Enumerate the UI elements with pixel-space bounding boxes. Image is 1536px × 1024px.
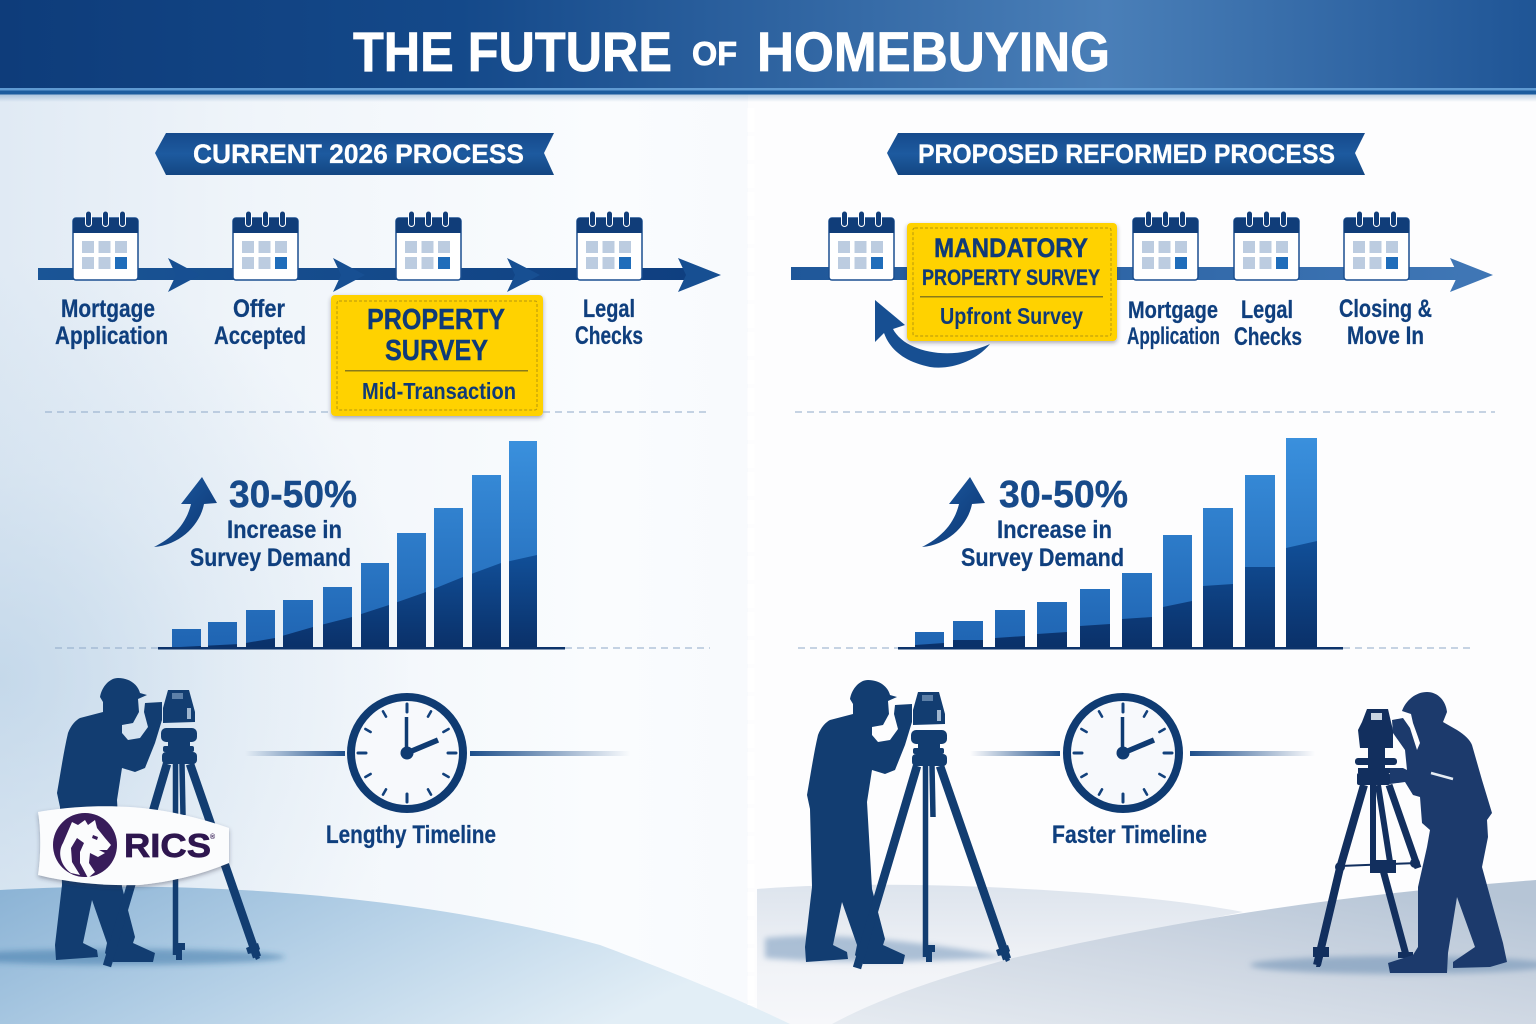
background: left panel [0, 0, 748, 1024]
RICS logo: RICS [124, 827, 211, 864]
callout: property survey mid-transaction: Mid-Transaction [362, 378, 516, 404]
calendar icon: offer accepted [233, 211, 298, 280]
title: HOMEBUYING [757, 20, 1110, 83]
title: THE FUTURE [353, 20, 672, 83]
banner: proposed reformed process: PROPOSED REFORMED PROCESS [918, 139, 1335, 169]
timeline arrow: current [38, 258, 721, 292]
title: OF [692, 35, 737, 72]
step label: offer accepted [214, 295, 306, 350]
clock: lengthy timeline [245, 694, 630, 812]
stat: 30-50% increase in survey demand: Increase in [227, 516, 342, 544]
surveyor silhouette [55, 678, 260, 966]
background: right panel [748, 0, 1536, 1024]
step label: mortgage application [1127, 297, 1220, 350]
step label: offer accepted: Accepted [214, 322, 306, 350]
step label: mortgage application [55, 295, 168, 350]
step label: mortgage application: Mortgage [61, 295, 155, 323]
callout: mandatory property survey: Upfront Survey [940, 303, 1083, 329]
step label: mortgage application: Application [55, 322, 168, 350]
step label: legal checks: Checks [575, 322, 643, 350]
stat: 30-50% increase in survey demand: Survey Demand [190, 544, 351, 572]
banner: current 2026 process: CURRENT 2026 PROCESS [193, 139, 524, 169]
centre divider [748, 108, 754, 1005]
callout: mandatory property survey: PROPERTY SURVEY [922, 265, 1100, 290]
banner: current 2026 process [155, 133, 554, 175]
step label: legal checks: Checks [1234, 323, 1302, 351]
RICS logo [38, 806, 229, 885]
calendar icon: survey start [829, 211, 894, 280]
clock: faster timeline [970, 694, 1315, 812]
calendar icon: mortgage application [73, 211, 138, 280]
callout: mandatory property survey: MANDATORY [934, 233, 1088, 263]
label: faster timeline: Faster Timeline [1052, 821, 1207, 849]
timeline arrow: reformed [791, 258, 1493, 292]
step label: offer accepted: Offer [233, 295, 285, 323]
stat: 30-50% increase in survey demand: Increase in [997, 516, 1112, 544]
right front hill [832, 880, 1536, 1024]
step label: closing and move in: Move In [1347, 322, 1424, 350]
step label: mortgage application: Mortgage [1128, 297, 1218, 324]
callout: property survey mid-transaction: SURVEY [385, 335, 488, 367]
step label: legal checks [1234, 296, 1302, 351]
step label: legal checks [575, 295, 643, 350]
section divider [45, 412, 710, 648]
callout: property survey mid-transaction [331, 295, 543, 416]
curved arrow back to start [875, 300, 990, 368]
calendar icon: closing and move in [1344, 211, 1409, 280]
stat: 30-50% increase in survey demand: 30-50% [229, 474, 357, 516]
step label: legal checks: Legal [1241, 296, 1293, 324]
header band [0, 0, 1536, 102]
title [353, 20, 1110, 83]
right back hill [757, 885, 1243, 1024]
calendar icon: legal checks [1234, 211, 1299, 280]
callout: mandatory property survey [907, 223, 1117, 341]
section divider [795, 412, 1495, 648]
surveyor silhouette: right [1313, 692, 1507, 973]
icon: growth arrow [154, 477, 217, 547]
step label: legal checks: Legal [583, 295, 635, 323]
step label: closing and move in [1339, 295, 1432, 350]
stat: 30-50% increase in survey demand [961, 474, 1128, 572]
stat: 30-50% increase in survey demand [190, 474, 357, 572]
banner: proposed reformed process [887, 133, 1365, 175]
step label: mortgage application: Application [1127, 323, 1220, 350]
callout: property survey mid-transaction: PROPERTY [367, 304, 505, 336]
bar chart: survey demand [898, 438, 1343, 650]
left ground hill [0, 887, 790, 1024]
ground shadows [0, 936, 1536, 974]
icon: growth arrow [922, 477, 985, 547]
calendar icon: mortgage application [1133, 211, 1198, 280]
RICS logo: ® [210, 833, 216, 841]
step label: closing and move in: Closing & [1339, 295, 1432, 323]
stat: 30-50% increase in survey demand: 30-50% [999, 474, 1128, 516]
surveyor silhouette: left [805, 680, 1010, 968]
calendar icon: legal checks [577, 211, 642, 280]
panel: reformed process [791, 133, 1507, 973]
bar chart: survey demand [158, 441, 565, 650]
calendar icon: property survey [396, 211, 461, 280]
stat: 30-50% increase in survey demand: Survey Demand [961, 544, 1124, 572]
panel: current process [38, 133, 721, 966]
label: lengthy timeline: Lengthy Timeline [326, 821, 496, 849]
